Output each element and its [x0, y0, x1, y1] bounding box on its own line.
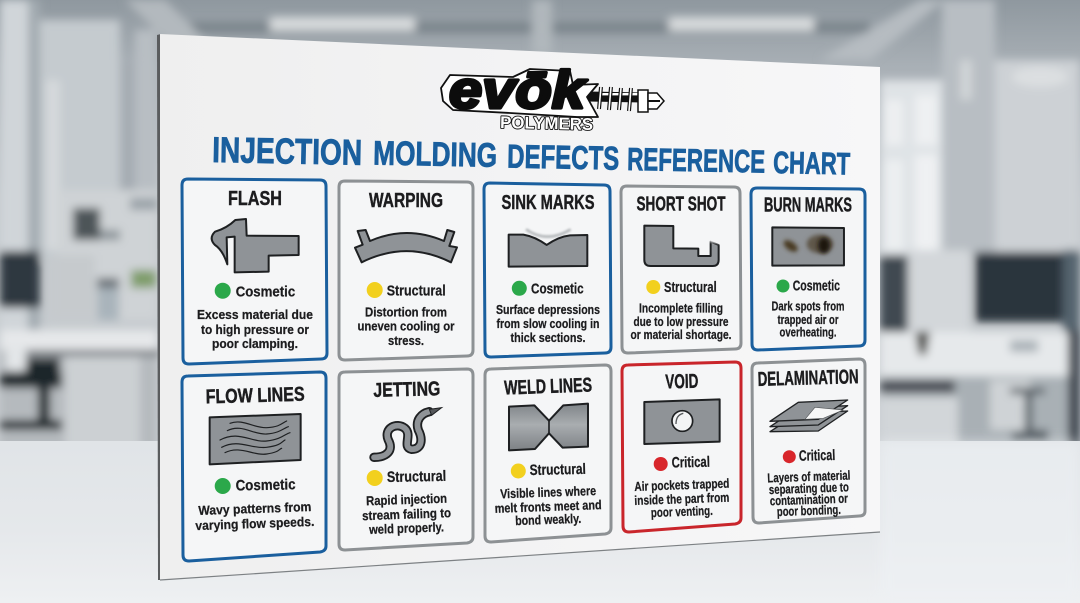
severity: structural: Structural: [529, 461, 586, 479]
panel: flash: [182, 179, 327, 364]
description: [195, 499, 315, 533]
description: poor clamping.: [212, 336, 298, 351]
heading: jetting: JETTING: [373, 378, 441, 402]
panel: sink marks: [484, 183, 611, 357]
description: Excess material due: [197, 307, 313, 322]
heading: burn marks: BURN MARKS: [764, 195, 852, 217]
description: Visible lines where: [500, 483, 596, 501]
heading: delamination: DELAMINATION: [757, 366, 859, 391]
description: varying flow speeds.: [195, 514, 315, 533]
severity: structural: [367, 468, 446, 486]
description: [494, 483, 602, 528]
icon: burn spots: [772, 227, 844, 266]
severity: structural: [367, 282, 446, 299]
severity: critical: Critical: [799, 447, 835, 465]
title: CHART: [773, 145, 851, 181]
panel: warping: [339, 181, 473, 360]
title: MOLDING: [373, 135, 498, 175]
description: Surface depressions: [496, 302, 600, 317]
description: [358, 305, 454, 348]
severity: cosmetic: [512, 280, 584, 297]
description: overheating.: [780, 325, 836, 340]
description: Air pockets trapped: [634, 476, 730, 494]
severity: cosmetic: Cosmetic: [236, 284, 295, 301]
panel: flow lines: [182, 372, 326, 561]
description: [634, 476, 730, 520]
icon: flow lines pattern: [210, 414, 301, 464]
heading: sink marks: SINK MARKS: [502, 192, 594, 214]
icon: sink mark: [509, 229, 587, 267]
severity: critical: [654, 454, 710, 471]
description: or material shortage.: [630, 327, 732, 342]
description: melt fronts meet and: [494, 497, 602, 516]
description: separating due to: [769, 479, 849, 497]
description: Distortion from: [365, 305, 447, 320]
severity: cosmetic: Cosmetic: [793, 278, 840, 295]
panel: burn marks: [751, 188, 865, 350]
heading: weld lines: WELD LINES: [504, 374, 592, 400]
title: DEFECTS: [507, 138, 620, 177]
description: uneven cooling or: [358, 319, 454, 334]
description: weld properly.: [368, 519, 444, 537]
panel: short shot: [621, 186, 741, 353]
description: Rapid injection: [366, 491, 447, 508]
description: to high pressure or: [201, 322, 309, 337]
description: poor venting.: [651, 503, 713, 520]
description: from slow cooling in: [496, 316, 600, 331]
title: [212, 129, 851, 181]
description: poor bonding.: [777, 502, 841, 519]
logo: [441, 61, 664, 134]
severity: structural: [646, 279, 717, 296]
icon: warped part: [355, 230, 457, 262]
description: Layers of material: [767, 468, 851, 485]
icon: separating layers: [770, 400, 848, 432]
description: [496, 302, 600, 345]
description: contamination or: [770, 491, 848, 508]
logo subtitle: POLYMERS: [500, 113, 593, 134]
description: stress.: [388, 333, 424, 348]
icon: short shot part: [644, 226, 722, 266]
description: Wavy patterns from: [198, 499, 312, 518]
heading: flash: FLASH: [228, 188, 282, 210]
icon: weld joint: [509, 404, 588, 450]
description: Dark spots from: [772, 299, 844, 314]
description: [362, 491, 451, 537]
description: Incomplete filling: [639, 301, 723, 316]
description: [772, 299, 844, 340]
description: trapped air or: [778, 312, 838, 327]
icon: air pocket: [644, 399, 720, 444]
panel: void: [622, 362, 741, 532]
severity: cosmetic: [215, 283, 295, 301]
severity: cosmetic: Cosmetic: [531, 280, 584, 297]
icon: flash defect: [212, 219, 299, 272]
icon: jetting stream: [374, 408, 442, 457]
description: [767, 468, 851, 519]
description: due to low pressure: [634, 314, 728, 329]
severity: structural: Structural: [387, 282, 446, 299]
severity: critical: Critical: [671, 454, 710, 471]
severity: cosmetic: Cosmetic: [235, 476, 296, 494]
heading: warping: WARPING: [369, 190, 443, 212]
description: stream failing to: [362, 505, 451, 523]
panel: jetting: [339, 369, 473, 550]
panel: weld lines: [485, 365, 611, 542]
severity: critical: [783, 447, 835, 465]
severity: cosmetic: [215, 476, 296, 494]
severity: cosmetic: [776, 278, 840, 295]
description: thick sections.: [510, 330, 586, 345]
severity: structural: Structural: [387, 468, 446, 486]
heading: short shot: SHORT SHOT: [636, 194, 726, 216]
description: [197, 307, 313, 351]
description: inside the part from: [634, 490, 730, 508]
panel: delamination: [752, 359, 865, 523]
title: INJECTION: [212, 129, 363, 173]
title: REFERENCE: [627, 141, 766, 180]
severity: structural: [511, 461, 586, 479]
description: [630, 301, 732, 342]
icon: screw: [588, 87, 664, 112]
heading: void: VOID: [665, 371, 699, 393]
board panel: [157, 34, 880, 580]
logo wordmark: evōk: [449, 61, 588, 120]
severity: structural: Structural: [664, 279, 717, 296]
description: bond weakly.: [515, 511, 581, 528]
heading: flow lines: FLOW LINES: [205, 384, 305, 408]
